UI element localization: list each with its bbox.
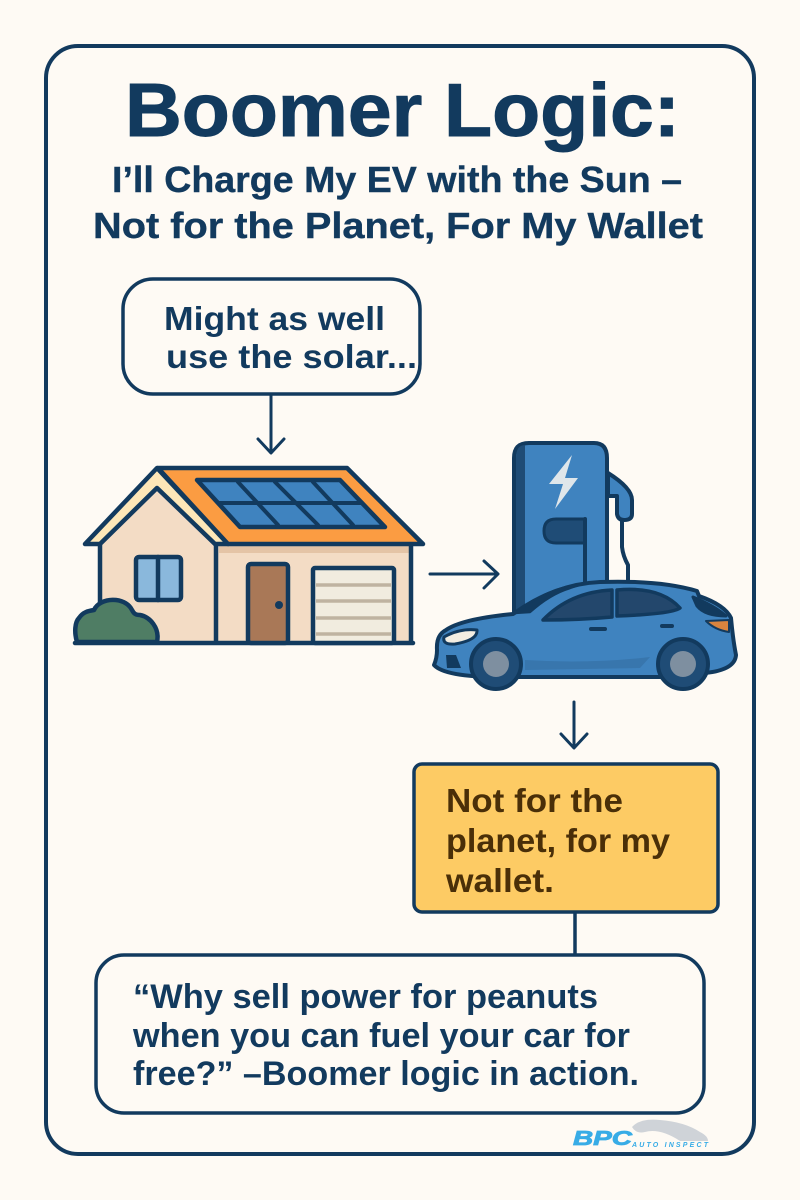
bush	[75, 600, 158, 642]
quote box	[96, 955, 704, 1113]
house wall right	[216, 544, 410, 642]
speech bubble: might as well use the solar: use the solar...	[166, 338, 417, 375]
quote box: “Why sell power for peanuts	[133, 978, 598, 1016]
logo: BPC Auto Inspect	[573, 1120, 709, 1150]
orange roof	[158, 468, 423, 544]
icon: EV charger	[514, 443, 632, 620]
car windows	[543, 590, 612, 620]
arrow: house to charger	[430, 561, 498, 588]
icon: house with solar panels	[75, 468, 423, 643]
subtitle: Not for the Planet, For My Wallet	[93, 205, 703, 246]
lightning bolt	[549, 455, 578, 509]
window	[136, 557, 181, 600]
speech bubble: might as well use the solar: Might as well	[164, 300, 385, 337]
yellow callout: planet, for my	[446, 822, 671, 859]
logo: BPC Auto Inspect: BPC	[573, 1128, 633, 1150]
headlight	[444, 630, 477, 644]
rear wheel	[658, 639, 708, 689]
quote box: free?” –Boomer logic in action.	[133, 1055, 639, 1093]
garage door	[313, 568, 394, 643]
logo: BPC Auto Inspect: AUTO INSPECT	[631, 1142, 709, 1149]
nozzle and cable	[608, 473, 632, 520]
quote box: when you can fuel your car for	[132, 1017, 630, 1055]
windshield band	[514, 584, 582, 613]
door	[248, 564, 288, 643]
subtitle: I’ll Charge My EV with the Sun –	[112, 159, 682, 200]
front vent	[446, 655, 461, 668]
icon: blue electric car	[434, 582, 736, 689]
yellow callout: Not for the	[446, 782, 623, 819]
yellow callout	[414, 764, 718, 912]
title: Boomer Logic:	[125, 68, 680, 152]
sill shade	[525, 657, 650, 670]
walls outline	[75, 545, 413, 643]
cable slot	[544, 519, 585, 543]
speech bubble: might as well use the solar	[123, 279, 420, 394]
rear window	[693, 597, 726, 616]
yellow callout: wallet.	[445, 862, 554, 899]
roof gable trim	[85, 468, 228, 544]
handles	[591, 626, 672, 629]
connector line	[573, 913, 577, 954]
house wall left	[100, 488, 215, 642]
front wheel	[471, 639, 521, 689]
tail light	[706, 620, 729, 632]
solar panels	[197, 480, 385, 527]
arrow: car to yellow box	[561, 702, 587, 748]
subtitle	[93, 159, 703, 246]
arrow: bubble to house	[258, 395, 284, 453]
